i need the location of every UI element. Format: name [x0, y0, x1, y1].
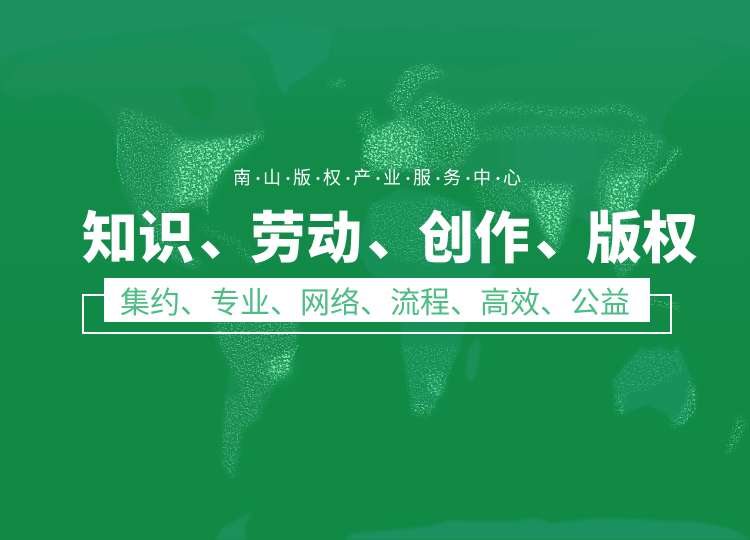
south america land	[212, 278, 300, 480]
lights: new zealand	[727, 415, 746, 455]
lights: eastern north america	[168, 130, 264, 216]
madagascar	[466, 338, 481, 383]
heading: organisation name: ·	[251, 169, 265, 189]
coast highlights	[117, 135, 695, 425]
arctic land at top	[0, 0, 750, 58]
lights: australia south east coast	[668, 375, 696, 428]
white banner	[104, 278, 650, 322]
greenland	[240, 23, 335, 97]
heading: organisation name: ·	[281, 169, 295, 189]
hudson bay	[179, 84, 215, 124]
lights: europe	[362, 93, 480, 178]
lights: indonesia	[590, 280, 680, 310]
lights: british isles	[357, 107, 378, 132]
lights: south africa core	[426, 372, 445, 395]
eurasia land	[362, 30, 735, 280]
north america land	[0, 38, 266, 270]
lights: iceland	[328, 78, 347, 88]
heading: organisation name: ·	[401, 169, 415, 189]
lights: caribbean	[198, 222, 262, 268]
core: europe	[362, 122, 425, 170]
heading: organisation name: ·	[491, 169, 505, 189]
black sea	[435, 147, 462, 162]
core: india	[530, 190, 570, 245]
antarctica	[345, 518, 750, 540]
banner text: 集约、专业、网络、流程、高效、公益	[120, 278, 630, 322]
heading: organisation name: ·	[341, 169, 355, 189]
core: brazil	[268, 350, 292, 378]
heading: organisation name: ·	[461, 169, 475, 189]
heading: organisation name: 南 山 版 权 产 业 服 务 中 心	[233, 164, 521, 190]
lights: south america north	[212, 278, 300, 400]
lights: south america south	[222, 395, 262, 480]
lights: russia corridor	[470, 106, 645, 122]
lights: australia north west	[613, 345, 685, 395]
lights: australia south west	[615, 395, 625, 416]
lights: western north america	[116, 108, 200, 268]
lights: scandinavia	[387, 63, 447, 117]
lights: japan	[645, 146, 682, 188]
lights: africa south	[402, 345, 458, 413]
australia land	[613, 343, 695, 427]
city glow	[165, 118, 650, 393]
city lights	[116, 63, 746, 480]
lights: southeast asia	[595, 225, 640, 278]
main title: 知识、劳动、创作、版权	[82, 191, 698, 275]
antarctic peninsula	[215, 510, 254, 540]
core: eastern usa	[176, 134, 262, 205]
outlined frame	[82, 294, 672, 334]
lights: north africa	[370, 195, 480, 265]
heading: organisation name: ·	[311, 169, 325, 189]
heading: organisation name: ·	[371, 169, 385, 189]
lights: india	[522, 180, 575, 256]
lights: china	[595, 128, 665, 225]
heading: organisation name: ·	[431, 169, 445, 189]
bright city core lights	[176, 122, 648, 378]
core: east china	[608, 165, 648, 212]
lights: south america brazil coast	[262, 345, 295, 382]
lights: middle east	[470, 175, 530, 225]
africa land	[356, 188, 497, 413]
tibet and central asia plateau	[505, 120, 610, 195]
